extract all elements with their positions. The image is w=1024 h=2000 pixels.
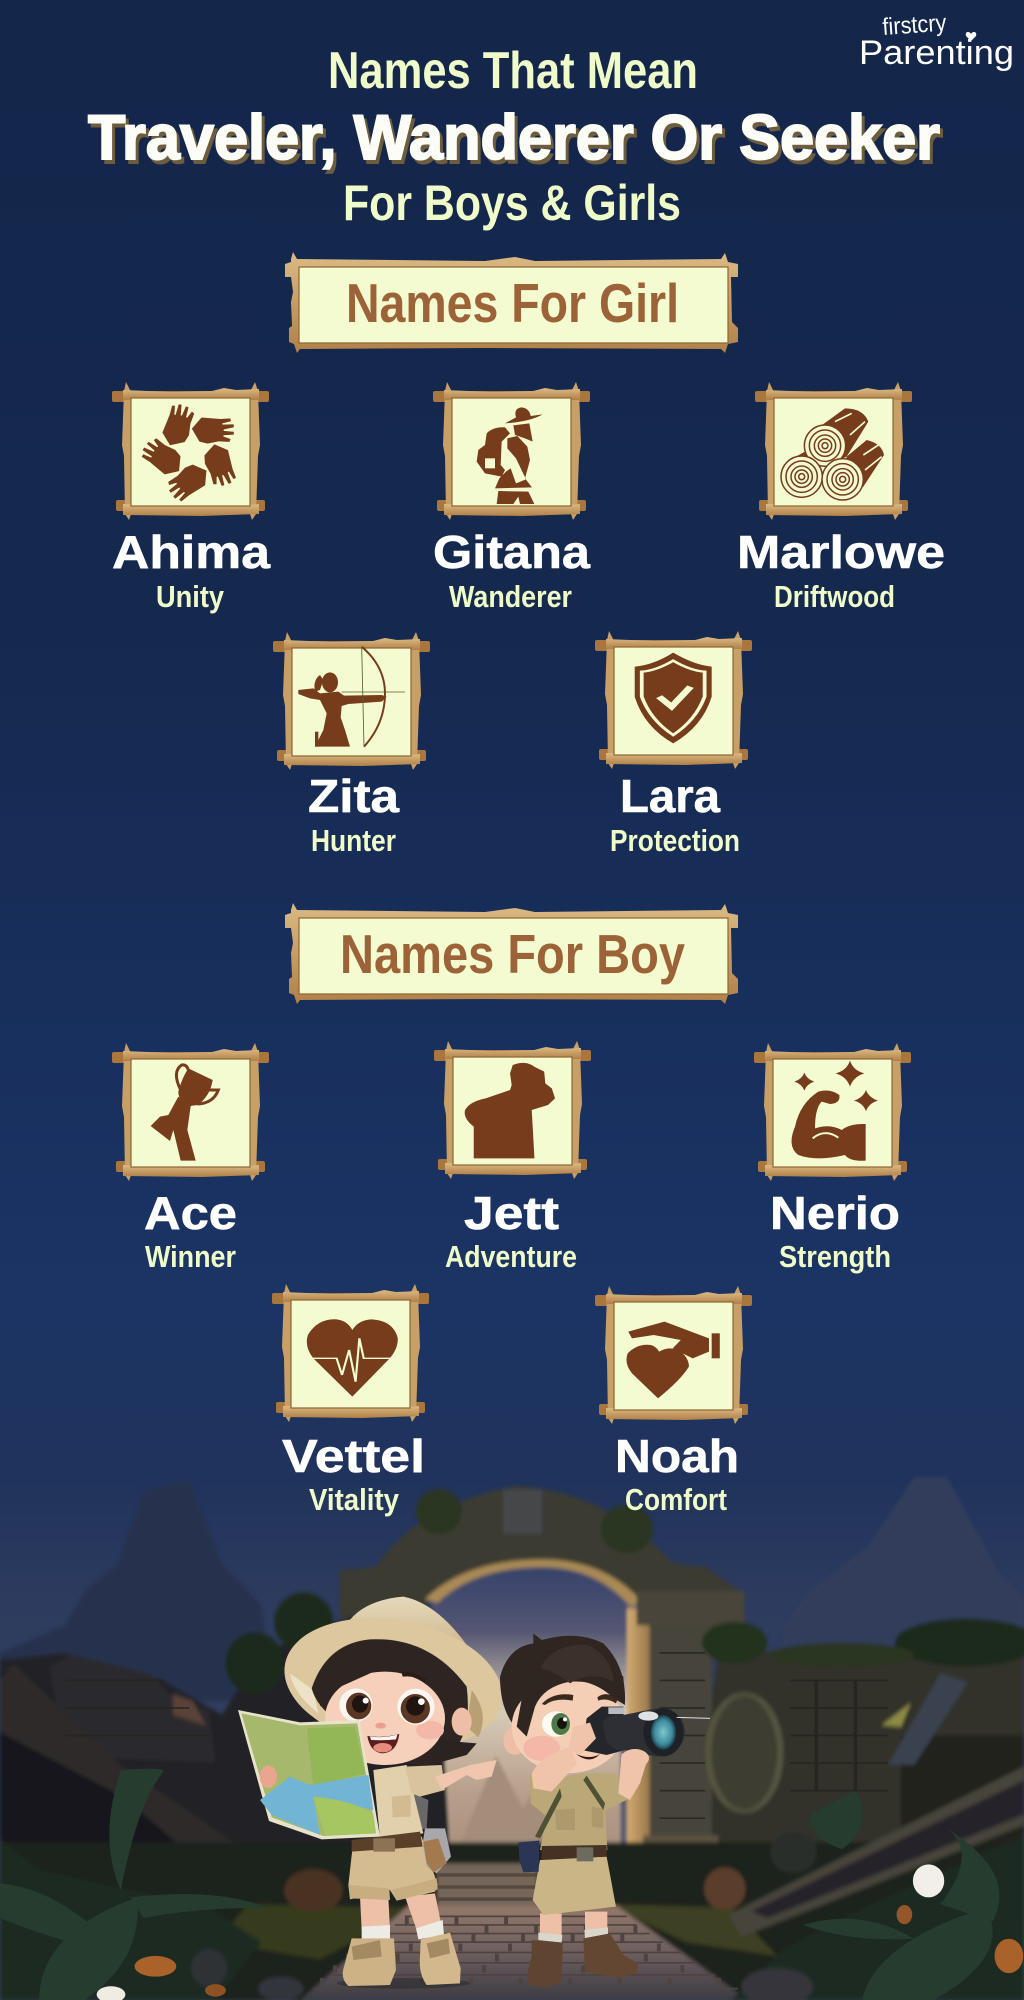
card: Noah: Comfort bbox=[625, 1482, 727, 1517]
section banner: Names For Girl: Names For Girl bbox=[346, 272, 679, 334]
illustration: jungle ruins scene bbox=[0, 1477, 1024, 2000]
girl eyes bbox=[339, 1688, 373, 1722]
title: Traveler, Wanderer Or Seeker bbox=[88, 103, 940, 173]
card: Zita bbox=[273, 632, 430, 858]
icon: flexed arm with sparkles bbox=[792, 1061, 878, 1161]
card: Marlowe bbox=[737, 382, 945, 614]
card: Ahima: Ahima bbox=[112, 526, 270, 578]
card: Nerio: Strength bbox=[779, 1239, 891, 1274]
icon: shield with check bbox=[635, 653, 712, 743]
card: Jett: Jett bbox=[464, 1187, 559, 1239]
illustration: boy explorer with camera bbox=[500, 1633, 710, 1987]
icon: hiker with backpack bbox=[477, 407, 543, 504]
card: Marlowe: Driftwood bbox=[774, 579, 895, 614]
icon: joined hands bbox=[137, 403, 246, 509]
boy eye bbox=[542, 1711, 570, 1737]
section banner: Names For Boy: Names For Boy bbox=[340, 923, 685, 985]
card: Noah: Noah bbox=[615, 1430, 739, 1482]
card: Zita: Hunter bbox=[311, 823, 396, 858]
boy arms bbox=[532, 1747, 577, 1792]
icon: archer bbox=[298, 647, 405, 747]
card: Ace: Winner bbox=[145, 1239, 236, 1274]
illustration: girl explorer with map bbox=[238, 1597, 513, 1989]
title: Names That Mean bbox=[328, 42, 698, 100]
flowers bbox=[97, 1864, 1023, 2000]
girl hair and face bbox=[312, 1639, 468, 1765]
card: Vettel: Vettel bbox=[282, 1430, 425, 1482]
boy camera bbox=[582, 1707, 710, 1757]
girl map bbox=[238, 1710, 380, 1839]
stairs and stone path detail bbox=[313, 1875, 738, 1989]
section banner: Names For Girl bbox=[285, 252, 738, 353]
card: Vettel bbox=[272, 1284, 429, 1517]
icon: explorer with binoculars bbox=[465, 1063, 555, 1158]
girl hat bbox=[347, 1597, 467, 1647]
title: Traveler, Wanderer Or Seeker bbox=[91, 107, 943, 177]
icon: heart with pulse bbox=[307, 1319, 398, 1397]
section banner: Names For Boy bbox=[285, 903, 738, 1004]
card: Marlowe: Marlowe bbox=[737, 526, 945, 578]
card: Jett: Adventure bbox=[445, 1239, 577, 1274]
icon: trophy in hand bbox=[151, 1065, 218, 1161]
title: For Boys & Girls bbox=[343, 175, 681, 231]
logo: FirstCry Parenting: firstcry bbox=[882, 10, 947, 41]
icon: hand over heart bbox=[626, 1322, 720, 1398]
card: Gitana bbox=[433, 382, 590, 614]
card: Gitana: Wanderer bbox=[449, 579, 572, 614]
title bbox=[88, 42, 943, 231]
card: Ace bbox=[112, 1043, 269, 1274]
card: Lara: Lara bbox=[620, 770, 720, 822]
card: Lara: Protection bbox=[610, 823, 740, 858]
card: Zita: Zita bbox=[308, 770, 399, 822]
card: Jett bbox=[434, 1041, 591, 1274]
card: Gitana: Gitana bbox=[433, 526, 590, 578]
card: Vettel: Vitality bbox=[309, 1482, 400, 1517]
card: Ahima bbox=[112, 382, 270, 614]
logo: FirstCry Parenting: Parenting bbox=[859, 34, 1014, 72]
card: Nerio bbox=[754, 1043, 911, 1274]
leaves bbox=[0, 1769, 1000, 2000]
card: Ace: Ace bbox=[144, 1187, 237, 1239]
wall masonry lines bbox=[65, 1653, 888, 1818]
icon: logs bbox=[781, 408, 884, 500]
card: Ahima: Unity bbox=[156, 579, 225, 614]
card: Noah bbox=[595, 1286, 752, 1517]
logo: FirstCry Parenting bbox=[859, 10, 1014, 72]
card: Lara bbox=[595, 631, 752, 858]
card: Nerio: Nerio bbox=[770, 1187, 900, 1239]
